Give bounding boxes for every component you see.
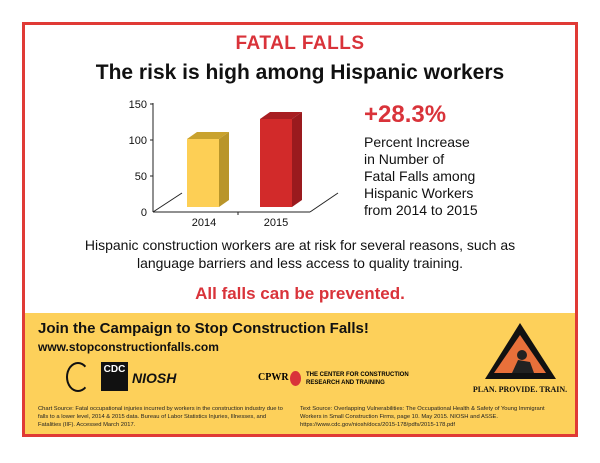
stat callout: Hispanic Workers [364,185,473,201]
stat callout: in Number of [364,151,444,167]
stat callout: +28.3% [364,101,446,128]
stat callout [364,101,478,218]
logos: HHS CDC NIOSH: CDC [104,364,125,375]
stat callout: Fatal Falls among [364,168,475,184]
bar chart: 0 [141,207,147,219]
logos: HHS CDC NIOSH [66,362,177,392]
body text [85,237,515,271]
bar 2015 [260,112,302,207]
prevention message: All falls can be prevented. [195,284,405,303]
subtitle: The risk is high among Hispanic workers [96,61,504,84]
text source: Text Source: Overlapping Vulnerabilities: The Occupational Health & Safety of Young Immigrant Workers in Small Construction Firms, page 10. May 2015. NIOSH and ASSE. https://www.cdc.gov/niosh/docs/2015-178/pdfs/2015-178.pdf [300,406,545,428]
icon: warning triangle [485,323,556,379]
logo: CPWR: RESEARCH AND TRAINING [306,380,385,386]
bar chart: 2014 [192,217,216,229]
bar chart: 100 [129,135,147,147]
body text: Hispanic construction workers are at risk for several reasons, such as [85,237,515,253]
campaign heading: www.stopconstructionfalls.com [38,340,219,354]
chart source: Chart Source: Fatal occupational injuries incurred by workers in the construction industry due to falls to a lower level, 2014 & 2015 data. Bureau of Labor Statistics Injuries, Illnesses, and Fatalities (IIF). Accessed March 2017. [38,406,283,428]
bar chart: 2015 [264,217,288,229]
tagline: PLAN. PROVIDE. TRAIN. [473,385,567,394]
title: FATAL FALLS [236,33,364,54]
logo: CPWR: CPWR [258,372,289,383]
bar chart: 50 [135,171,147,183]
campaign heading: Join the Campaign to Stop Construction Falls! [38,320,369,337]
logo: CPWR [258,371,409,386]
campaign heading [38,320,369,354]
bar chart: 150 [129,99,147,111]
logos: HHS CDC NIOSH: NIOSH [132,370,176,386]
stat callout: Percent Increase [364,134,470,150]
logo: CPWR: THE CENTER FOR CONSTRUCTION [306,372,409,378]
body text: language barriers and less access to quality training. [137,255,463,271]
stat callout: from 2014 to 2015 [364,202,478,218]
bar 2014 [187,132,229,207]
yellow band [25,313,575,437]
